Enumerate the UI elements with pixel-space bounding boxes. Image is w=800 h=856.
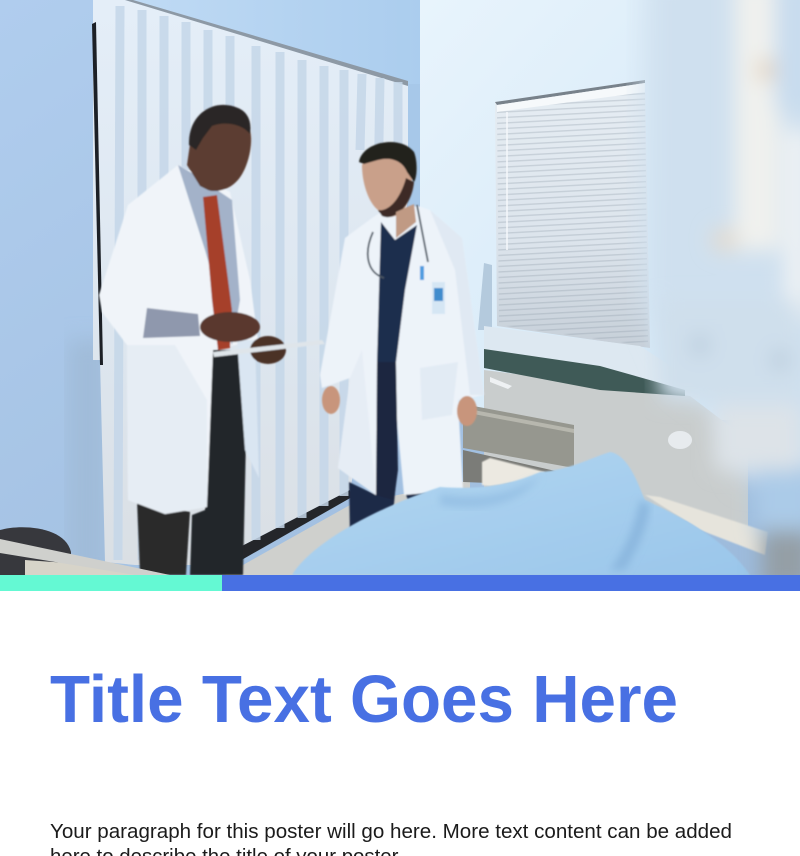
- blurred foreground iv equipment: [645, 0, 800, 590]
- paragraph: Your paragraph for this poster will go here. More text content can be added: [50, 821, 732, 843]
- tie: [203, 195, 232, 350]
- doctor on the left: [99, 105, 325, 575]
- window blinds: [495, 80, 650, 348]
- lab coat: [320, 206, 484, 495]
- head and neck: [187, 114, 251, 191]
- bed counter and cabinet: [463, 263, 748, 530]
- blanket: [292, 452, 750, 575]
- photo: doctors at a hospital bedside: [0, 0, 800, 590]
- shirt: [178, 165, 240, 345]
- legs: [348, 481, 396, 528]
- vertical curtain: [92, 0, 420, 565]
- scrubs: [377, 222, 417, 362]
- left bed rail and chair: [0, 527, 170, 575]
- accent bar: blue segment: [222, 575, 800, 591]
- hands: [322, 386, 340, 414]
- hands: [200, 312, 260, 342]
- floor: [225, 480, 470, 575]
- lab coat: main body: [99, 165, 258, 514]
- trousers: [190, 350, 247, 575]
- title: Title Text Goes Here: [50, 662, 678, 737]
- bed rail: [482, 458, 545, 486]
- clipboard: [213, 340, 325, 357]
- pen: [420, 266, 424, 280]
- sleeve cuff: [143, 308, 200, 338]
- doctor on the right: [320, 142, 484, 537]
- lab coat: right flap: [237, 340, 259, 478]
- stethoscope: [368, 205, 428, 278]
- head: [362, 155, 412, 217]
- accent bar: mint segment: [0, 575, 222, 591]
- hospital room walls: [0, 0, 800, 580]
- id badge: [432, 282, 445, 314]
